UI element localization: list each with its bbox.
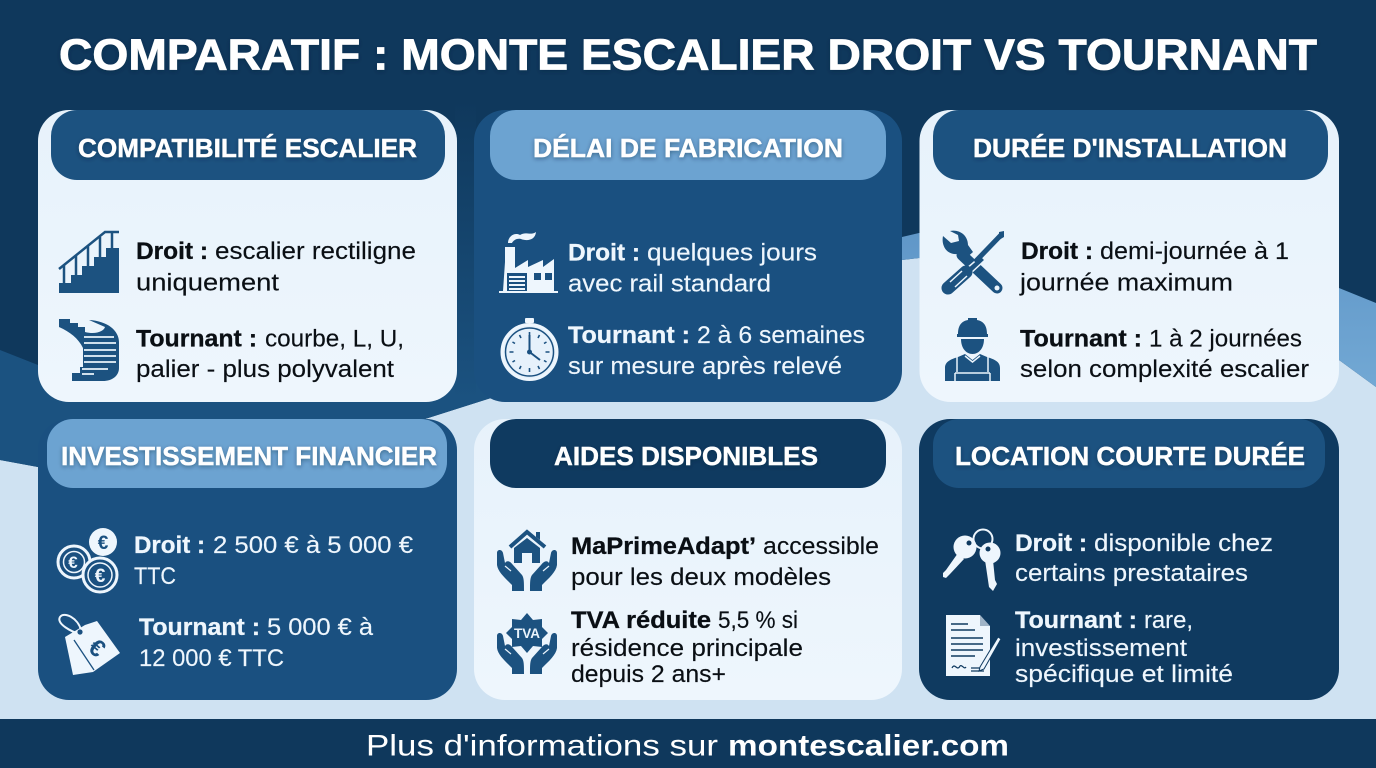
panel: durée d'installation <box>920 110 1339 402</box>
icon: stopwatch <box>502 318 557 380</box>
heading: investissement financier <box>47 419 447 488</box>
icon: house in hands <box>497 532 557 591</box>
text: tournant <box>1015 607 1233 688</box>
text: tournant: Tournant : <box>136 326 257 352</box>
text: tournant: 1 à 2 journées <box>1149 326 1302 352</box>
text: tournant: rare, <box>1144 607 1193 634</box>
background: light-blue right wave <box>902 233 1376 387</box>
heading: durée d'installation <box>933 110 1328 180</box>
text: droit: escalier rectiligne <box>215 238 416 265</box>
icon: worker <box>945 318 1000 381</box>
title: COMPARATIF : MONTE ESCALIER DROIT VS TOURNANT <box>59 30 1317 80</box>
text: MaPrimeAdapt: accessible <box>763 533 879 560</box>
heading: location courte durée: LOCATION COURTE DURÉE <box>955 441 1305 471</box>
footer band: montescalier.com <box>728 730 1009 762</box>
icon: wrench and screwdriver <box>943 231 1004 290</box>
heading: investissement financier: INVESTISSEMENT FINANCIER <box>61 441 437 471</box>
text: TVA réduite <box>571 607 803 688</box>
icon: euro coins <box>58 528 117 592</box>
background: mid-blue left wave <box>0 200 491 467</box>
panel: location courte durée <box>919 419 1339 700</box>
icon: straight staircase <box>59 232 119 293</box>
text: tournant: Tournant : <box>568 322 690 349</box>
text: MaPrimeAdapt: pour les deux modèles <box>571 564 831 591</box>
icon: price tag: € <box>83 634 110 663</box>
footer band: Plus d'informations sur <box>366 730 718 762</box>
text: tournant <box>568 322 865 380</box>
footer band <box>0 719 1376 768</box>
text: droit: Droit : <box>1015 530 1087 557</box>
text: tournant: sur mesure après relevé <box>568 353 842 380</box>
text: droit: uniquement <box>136 270 279 296</box>
icon: TVA badge in hands: TVA <box>514 626 540 641</box>
heading: durée d'installation: DURÉE D'INSTALLATION <box>973 133 1287 163</box>
text: droit: quelques jours <box>647 240 817 266</box>
text: tournant <box>139 614 374 672</box>
text: tournant: courbe, L, U, <box>265 326 404 352</box>
text: TVA réduite: depuis 2 ans+ <box>571 661 726 688</box>
text: tournant <box>1020 326 1309 383</box>
text: droit: Droit : <box>134 532 205 559</box>
icon: euro coins: € <box>95 566 106 587</box>
text: tournant: Tournant : <box>1015 607 1137 634</box>
heading: compatibilité escalier <box>51 110 445 180</box>
text: MaPrimeAdapt: MaPrimeAdapt’ <box>571 533 756 560</box>
icon: keys <box>943 530 1000 591</box>
icon: price tag <box>59 615 120 675</box>
panel: compatibilité escalier <box>38 110 457 402</box>
text: tournant: palier - plus polyvalent <box>136 356 394 383</box>
icon: TVA badge in hands <box>497 613 557 674</box>
text: droit: Droit : <box>136 238 208 265</box>
text: TVA réduite: 5,5 % si <box>718 607 798 634</box>
text: droit: Droit : <box>568 240 640 266</box>
icon: spiral staircase <box>59 319 119 381</box>
text: droit: TTC <box>134 563 176 590</box>
heading: location courte durée <box>933 419 1325 488</box>
text: droit: Droit : <box>1021 238 1093 265</box>
heading: compatibilité escalier: COMPATIBILITÉ ESCALIER <box>78 133 417 163</box>
text: tournant: 2 à 6 semaines <box>697 322 865 349</box>
text: tournant: spécifique et limité <box>1015 661 1233 688</box>
text: droit <box>1015 530 1273 587</box>
text: droit <box>568 240 817 298</box>
text: MaPrimeAdapt <box>571 533 879 591</box>
text: droit <box>136 238 416 296</box>
icon: euro coins: € <box>98 533 109 554</box>
text: droit <box>1019 238 1289 296</box>
panel: investissement financier <box>38 419 457 700</box>
heading: délai de fabrication: DÉLAI DE FABRICATION <box>533 133 843 163</box>
icon: euro coins: € <box>68 553 78 572</box>
text: droit: certains prestataires <box>1015 560 1248 587</box>
text: droit: demi-journée à 1 <box>1100 238 1289 265</box>
text: TVA réduite: TVA réduite <box>571 607 711 634</box>
text: tournant: Tournant : <box>1020 326 1142 352</box>
text: droit <box>134 532 414 590</box>
text: tournant: Tournant : <box>139 614 260 641</box>
panel: aides disponibles <box>474 419 902 700</box>
text: TVA réduite: résidence principale <box>571 635 803 662</box>
icon: signed contract <box>946 615 1001 676</box>
text: tournant: 12 000 € TTC <box>139 645 284 672</box>
text: droit: 2 500 € à 5 000 € <box>213 532 414 559</box>
icon: factory <box>499 232 558 293</box>
text: droit: journée maximum <box>1019 270 1233 296</box>
panel: délai de fabrication <box>474 110 902 402</box>
text: tournant: investissement <box>1015 635 1187 662</box>
heading: délai de fabrication <box>490 110 886 180</box>
text: droit: disponible chez <box>1094 530 1273 557</box>
background: gradient gap between top panels <box>455 100 476 400</box>
text: tournant <box>136 326 404 383</box>
heading: aides disponibles <box>490 419 886 488</box>
text: tournant: selon complexité escalier <box>1020 356 1309 383</box>
heading: aides disponibles: AIDES DISPONIBLES <box>554 441 818 471</box>
background: light lower wave <box>0 258 1376 768</box>
text: droit: avec rail standard <box>568 270 771 298</box>
text: tournant: 5 000 € à <box>267 614 374 641</box>
